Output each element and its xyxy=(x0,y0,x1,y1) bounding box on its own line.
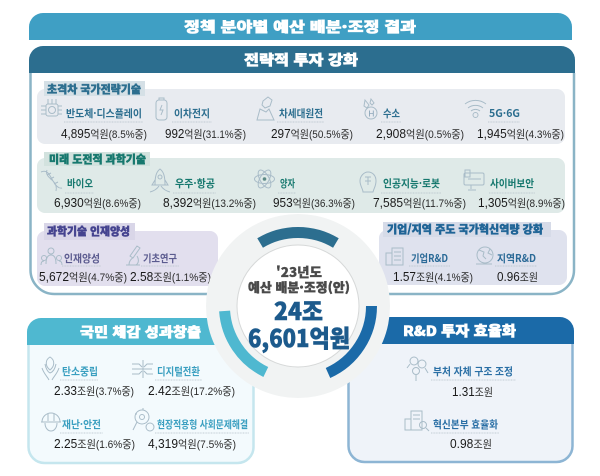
item: 혁신본부 효율화: 0.98조원 xyxy=(450,436,492,451)
panel: 전략적 투자 강화 xyxy=(29,46,575,294)
heading: 국민 체감 성과창출: 국민 체감 성과창출 xyxy=(80,321,201,341)
item: 5G·6G: 1,945억원(4.3%중) xyxy=(477,126,564,141)
group: 과학기술 인재양성 xyxy=(37,223,218,286)
item: 기초연구: 2.58조원(1.1%중) xyxy=(130,269,211,284)
item: 바이오: 6,930억원(8.6%중) xyxy=(54,195,141,210)
ring arc: R&D efficiency xyxy=(328,306,372,373)
center text: total budget xyxy=(248,292,350,354)
item: 탄소중립: 2.33조원(3.7%중) xyxy=(54,383,134,398)
item: 인재양성: 5,672억원(4.7%중) xyxy=(39,269,127,284)
title banner xyxy=(29,13,572,40)
item: 수소: 2,908억원(0.5%중) xyxy=(376,126,464,141)
item: 이차전지 xyxy=(156,98,246,141)
item: 인공지능·로봇: 인공지능·로봇 xyxy=(383,176,440,191)
ring arc: public performance xyxy=(225,311,266,372)
item: 양자: 양자 xyxy=(280,176,295,191)
item: 양자 xyxy=(254,168,355,210)
item: 기업R&D: 1.57조원(4.1%중) xyxy=(393,269,473,284)
group: 기업/지역 주도 국가혁신역량 강화 xyxy=(379,221,567,285)
item: 기업R&D xyxy=(386,248,473,284)
center text: subtitle: 예산 배분·조정(안) xyxy=(248,277,350,296)
item: 차세대원전: 차세대원전 xyxy=(279,106,323,121)
item: 바이오: 바이오 xyxy=(67,176,93,191)
heading: R&D 투자 효율화: R&D 투자 효율화 xyxy=(403,321,516,341)
item: 양자: 953억원(36.3%중) xyxy=(273,195,355,210)
item: 혁신본부 효율화 xyxy=(405,411,499,451)
group: 초격차 국가전략기술: 초격차 국가전략기술 xyxy=(47,81,141,97)
heading: 전략적 투자 강화: 전략적 투자 강화 xyxy=(244,50,358,70)
item: 기초연구: 기초연구 xyxy=(143,251,177,266)
item: 사이버보안: 사이버보안 xyxy=(490,176,534,191)
center budget circle xyxy=(206,214,390,398)
item: 수소: 수소 xyxy=(383,106,400,121)
group: 미래 도전적 과학기술: 미래 도전적 과학기술 xyxy=(49,151,146,167)
item: 부처 자체 구조 조정: 부처 자체 구조 조정 xyxy=(433,364,513,379)
item: 사이버보안: 1,305억원(8.9%중) xyxy=(478,195,565,210)
item: 우주·항공: 8,392억원(13.2%중) xyxy=(163,195,256,210)
item: 탄소중립: 탄소중립 xyxy=(62,364,98,379)
item: 기초연구 xyxy=(126,246,211,284)
item: 디지털전환: 2.42조원(17.2%중) xyxy=(148,383,235,398)
item: 탄소중립 xyxy=(42,357,134,398)
item: 재난·안전 xyxy=(41,413,135,451)
title banner: 정책 분야별 예산 배분·조정 결과 xyxy=(184,17,416,37)
item: 부처 자체 구조 조정: 1.31조원 xyxy=(452,384,493,399)
item: 반도체·디스플레이 xyxy=(41,99,147,141)
item: 수소 xyxy=(364,99,464,141)
item: 이차전지: 992억원(31.1%중) xyxy=(165,126,246,141)
item: 바이오 xyxy=(41,170,141,210)
item: 우주·항공: 우주·항공 xyxy=(175,176,215,191)
item: 지역R&D: 0.96조원 xyxy=(497,269,538,284)
item: 재난·안전: 재난·안전 xyxy=(62,417,101,432)
item: 사이버보안 xyxy=(464,170,565,210)
group: 미래 도전적 과학기술 xyxy=(37,151,565,213)
item: 이차전지: 이차전지 xyxy=(174,106,210,121)
item: 디지털전환 xyxy=(132,360,235,398)
item: 현장적용형 사회문제해결 xyxy=(133,408,249,451)
ring arc: strategic investment xyxy=(260,232,336,243)
item: 혁신본부 효율화: 혁신본부 효율화 xyxy=(433,417,498,432)
item: 반도체·디스플레이: 반도체·디스플레이 xyxy=(66,106,142,121)
item: 현장적용형 사회문제해결: 현장적용형 사회문제해결 xyxy=(157,417,248,432)
item: 기업R&D: 기업R&D xyxy=(411,251,448,266)
center text: total budget: 24조 xyxy=(274,292,323,327)
item: 인재양성: 인재양성 xyxy=(64,251,100,266)
item: 재난·안전: 2.25조원(1.6%중) xyxy=(54,436,135,451)
item: 디지털전환: 디지털전환 xyxy=(157,364,200,379)
panel: 국민 체감 성과창출 xyxy=(27,318,255,463)
item: 우주·항공 xyxy=(150,169,256,210)
group: 기업/지역 주도 국가혁신역량 강화: 기업/지역 주도 국가혁신역량 강화 xyxy=(387,221,543,237)
item: 인공지능·로봇: 7,585억원(11.7%중) xyxy=(373,195,466,210)
item: 수소: H xyxy=(368,110,374,118)
item: 지역R&D: 지역R&D xyxy=(497,251,536,266)
panel: R&D 투자 효율화 xyxy=(347,317,574,462)
item: 차세대원전: 297억원(50.5%중) xyxy=(271,126,353,141)
group: 과학기술 인재양성: 과학기술 인재양성 xyxy=(47,223,130,239)
center text: year: '23년도 xyxy=(276,262,322,281)
item: 인공지능·로봇 xyxy=(360,172,466,210)
item: 차세대원전 xyxy=(257,97,353,141)
center text: total budget: 6,601억원 xyxy=(248,319,350,354)
item: 현장적용형 사회문제해결: 4,319억원(7.5%중) xyxy=(148,436,236,451)
item: 5G·6G xyxy=(465,100,564,141)
item: 지역R&D xyxy=(476,247,538,284)
item: 반도체·디스플레이: 4,895억원(8.5%중) xyxy=(61,126,147,141)
group: 초격차 국가전략기술 xyxy=(37,81,565,144)
item: 인재양성 xyxy=(39,248,127,284)
item: 부처 자체 구조 조정 xyxy=(407,357,516,399)
item: 5G·6G: 5G·6G xyxy=(489,106,520,121)
